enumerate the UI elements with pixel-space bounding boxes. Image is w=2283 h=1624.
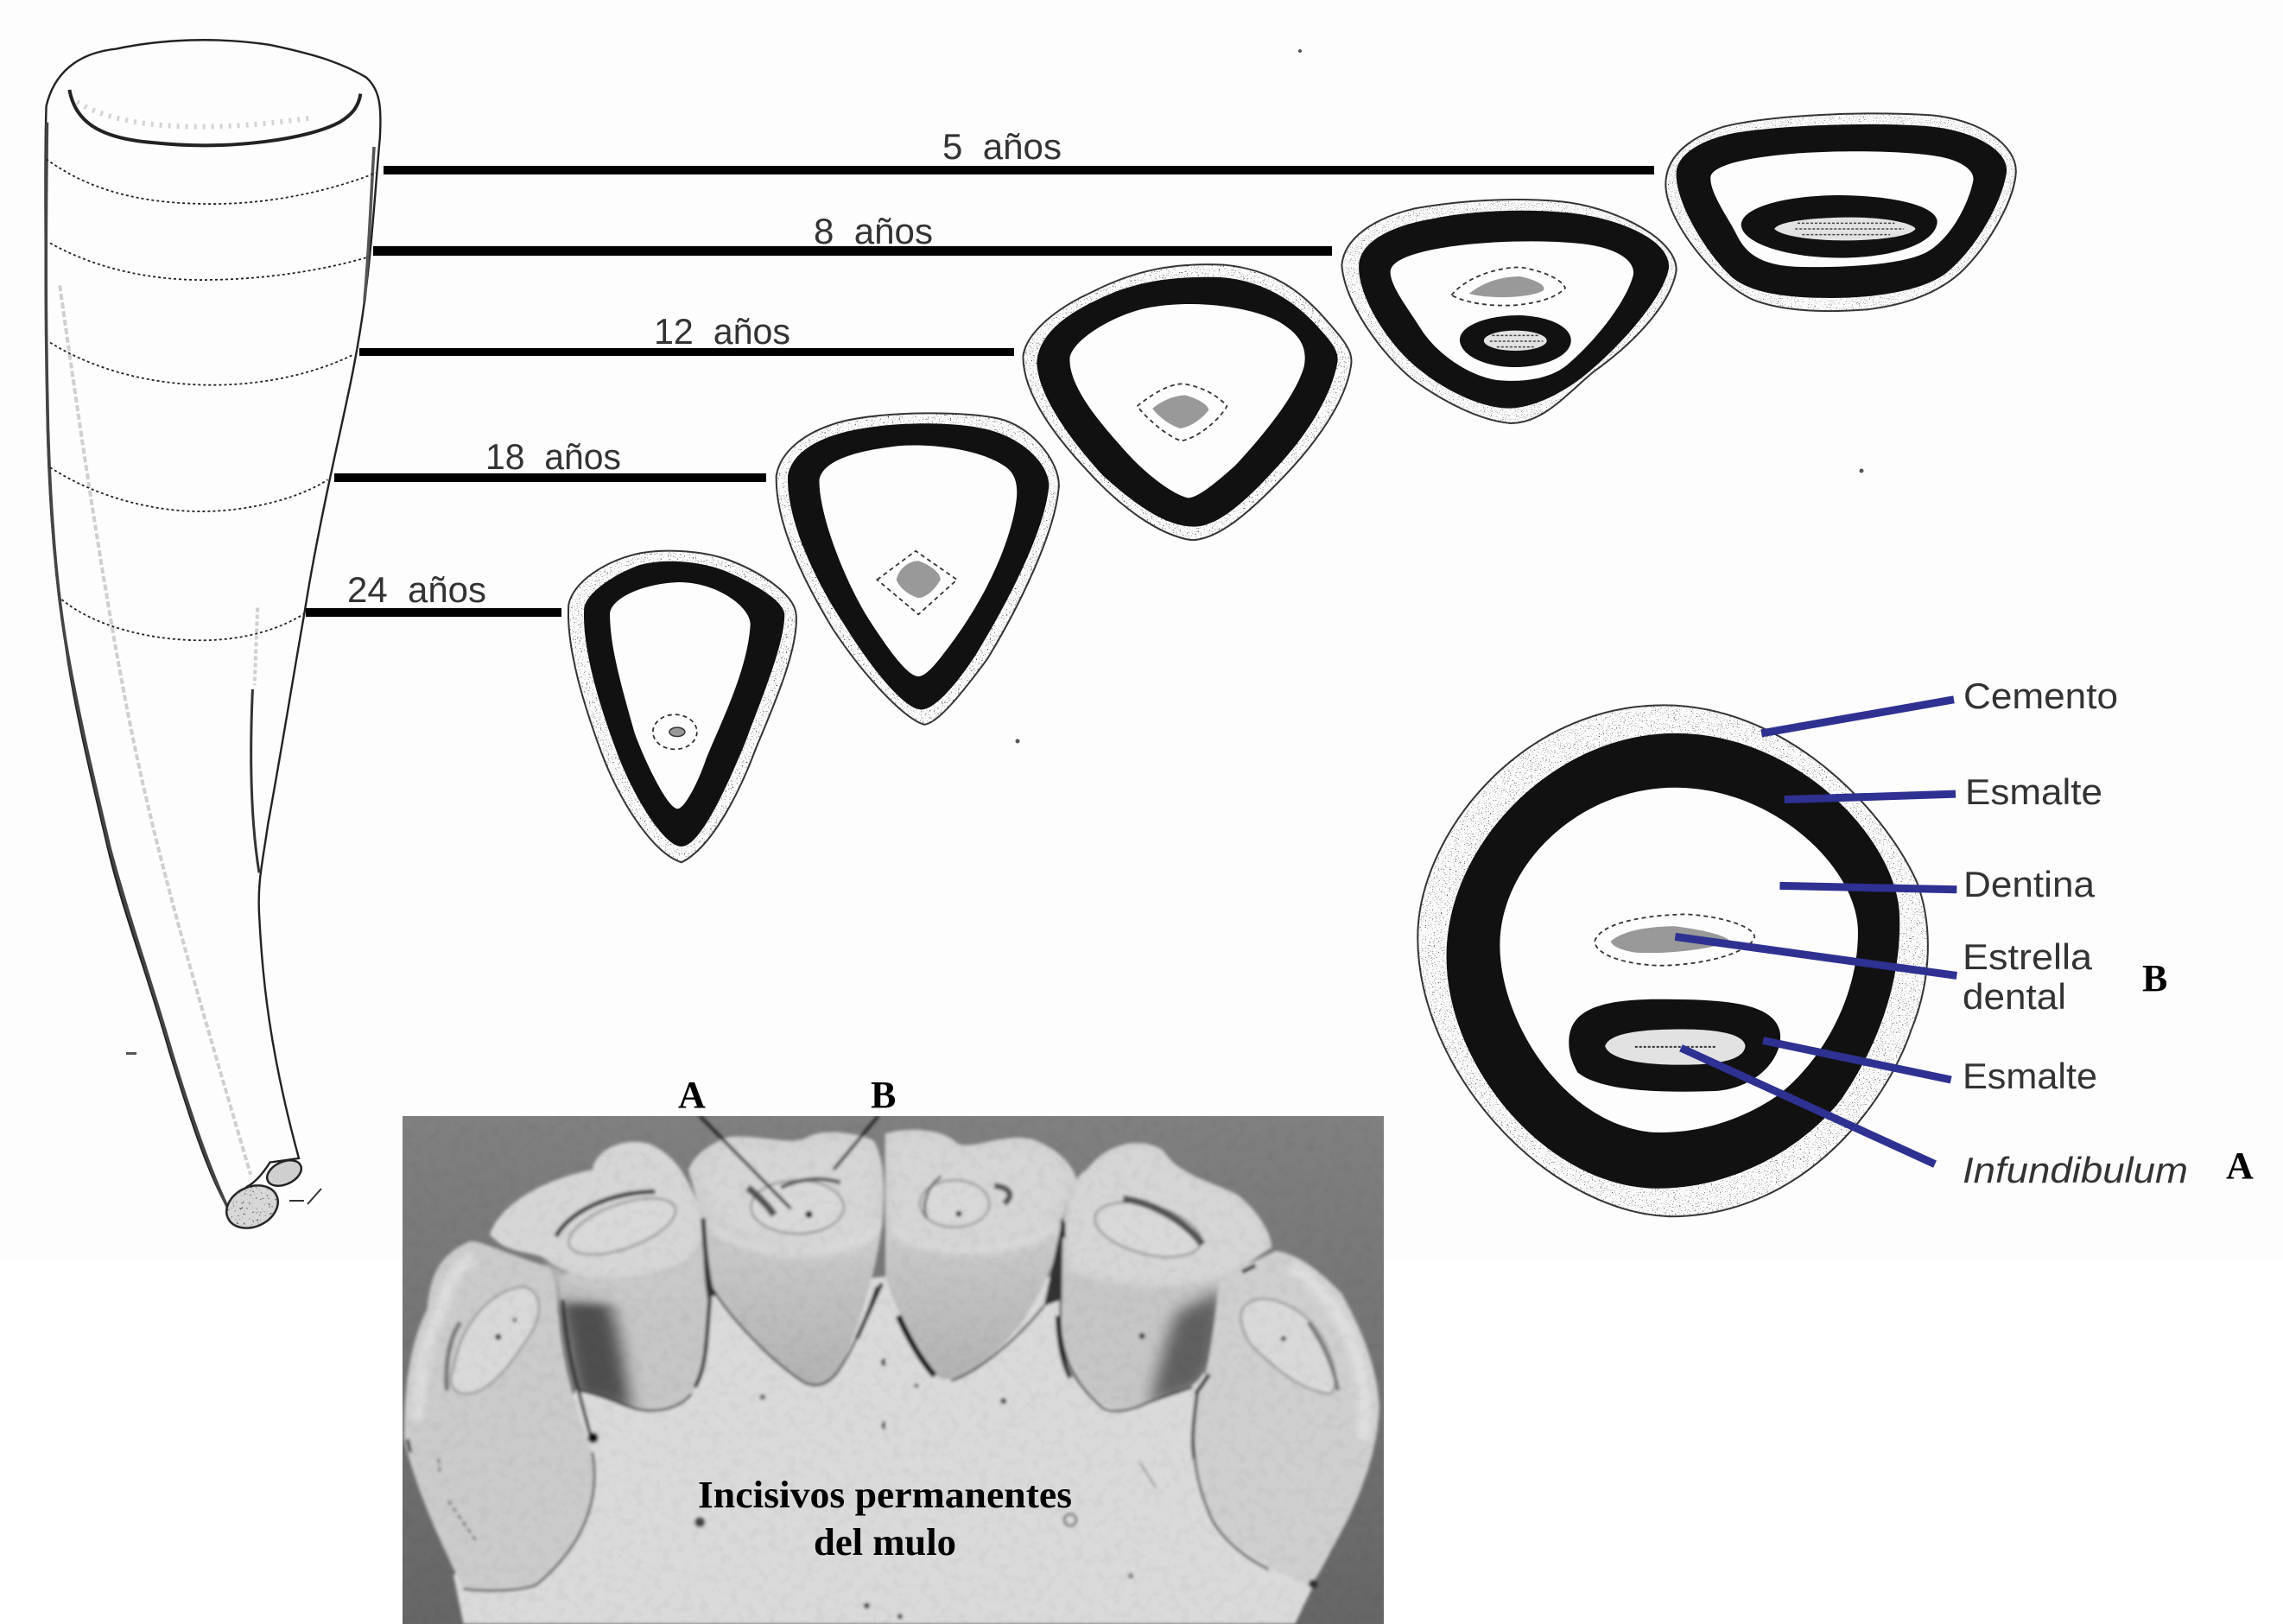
cross-section: 5 años <box>1665 113 2016 311</box>
marker: B: B <box>2142 957 2167 999</box>
lateral tooth crown <box>490 1142 703 1280</box>
corner tooth <box>404 1241 594 1591</box>
label: 18 años: 18 años <box>485 436 621 477</box>
leader lines <box>1675 700 1956 1164</box>
label: Esmalte inner: Esmalte <box>1963 1056 2097 1096</box>
marker: A: A <box>2226 1145 2254 1187</box>
label: 12 años: 12 años <box>654 311 790 352</box>
corner tooth right <box>1195 1251 1379 1585</box>
diagram: labelled tooth cross-section <box>1417 700 1956 1216</box>
specks on the sheet <box>126 49 1864 1055</box>
caption: Incisivos permanentes del mulo: del mulo <box>814 1521 956 1564</box>
inner enamel <box>1569 999 1780 1092</box>
lateral tooth body <box>560 1239 709 1411</box>
central tooth right <box>885 1130 1077 1379</box>
right half of jaw <box>885 1130 1379 1624</box>
label: Dentina: Dentina <box>1963 864 2096 904</box>
caption: Incisivos permanentes del mulo: Incisivos permanentes <box>698 1474 1072 1516</box>
cross-section: 12 años <box>1023 264 1351 540</box>
marker: A over photo: A <box>678 1074 706 1116</box>
label: Infundibulum: Infundibulum <box>1963 1150 2188 1190</box>
label: Cemento: Cemento <box>1963 676 2118 716</box>
label: 5 años: 5 años <box>942 126 1062 167</box>
drawing: longitudinal incisor tooth <box>45 40 380 1236</box>
layer: cement <box>1417 705 1928 1216</box>
label: Estrella dental <box>1963 936 2093 1017</box>
marker: B over photo: B <box>871 1074 896 1116</box>
cross-section: 24 años <box>568 551 796 862</box>
dental star <box>1595 914 1754 966</box>
label: Estrella dental: Estrella <box>1963 936 2093 977</box>
label: 24 años: 24 años <box>347 569 486 610</box>
infundibulum cavity <box>1605 1029 1745 1065</box>
label: Estrella dental: dental <box>1963 976 2066 1017</box>
central tooth left <box>688 1132 884 1386</box>
layer: enamel ring <box>1447 733 1899 1189</box>
bars: age leader lines <box>306 166 1654 617</box>
cross-section: 8 años <box>1341 200 1677 423</box>
lateral tooth right <box>1062 1143 1272 1411</box>
photo: mule permanent incisors <box>403 1116 1384 1624</box>
left half of jaw <box>404 1116 926 1624</box>
layer: dentine <box>1500 788 1858 1132</box>
cross-section: 18 años <box>777 413 1059 725</box>
background: upper drawing sheet <box>0 0 2283 1261</box>
label: Esmalte: Esmalte <box>1965 771 2102 812</box>
caption: Incisivos permanentes del mulo <box>698 1474 1072 1564</box>
label: 8 años: 8 años <box>814 211 933 251</box>
